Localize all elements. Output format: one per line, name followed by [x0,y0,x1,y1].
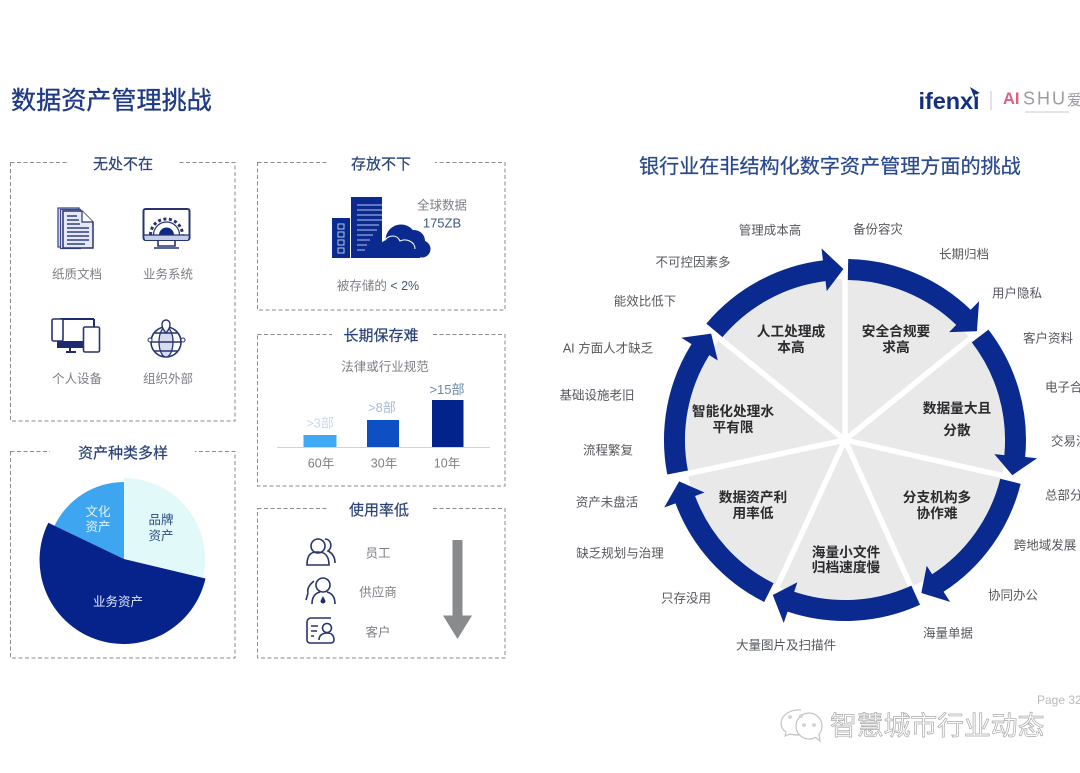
label: personal devices: 个人设备 [52,371,102,386]
pie chart: 资产 [148,529,174,543]
panel: 存放不下: 存放不下 [351,156,411,173]
sector: small file archiving: 归档速度慢 [812,559,881,575]
bar chart: >8部 [368,400,396,415]
logo: ifenxi and AISHU: ifenxi [918,88,980,114]
pie chart: 文化 [85,504,111,519]
panel: 长期保存难: 长期保存难 [343,328,419,344]
pie chart: 资产 [85,520,111,534]
icon: supplier [306,578,335,604]
sector: security compliance: 安全合规要 [862,324,930,339]
ring arrow: security [848,259,979,332]
outer labels: 客户资料 [1023,330,1073,346]
watermark icon: chat bubbles [781,710,822,741]
ring arrow: intelligence [640,331,739,475]
outer labels: 管理成本高 [739,222,801,238]
logo: ifenxi and AISHU: AI [1003,90,1020,108]
sector: manual cost: 人工处理成 [757,324,825,339]
outer labels: 大量图片及扫描件 [736,638,836,652]
outer labels: 用户隐私 [992,286,1042,300]
outer labels: 缺乏规划与治理 [576,546,664,560]
watermark text: 智慧城市行业动态 [830,711,1044,741]
icon: buildings and cloud [332,197,430,258]
stored share: 被存储的 < 2% [337,278,419,293]
icon: employee [307,539,335,565]
sector: limited intelligence: 智能化处理水 [692,404,774,419]
outer labels: 协同办公 [988,588,1038,602]
outer labels: 备份容灾 [853,222,903,236]
panel: 使用率低 [258,501,505,658]
page title: 数据资产管理挑战 [11,87,212,115]
panel: 无处不在: 无处不在 [93,156,153,173]
sector dividers [672,262,1018,602]
logo: ifenxi and AISHU [918,87,1080,114]
sector: large dispersed data: 分散 [943,422,971,438]
icon: customer [307,618,334,643]
panel: 无处不在 [10,155,235,421]
pie chart: 业务资产 [93,594,143,609]
pie chart: 品牌 [148,512,174,527]
outer labels: 不可控因素多 [655,256,731,270]
ring arrow: labour cost [706,222,846,370]
outer labels: 基础设施老旧 [559,388,635,402]
bar chart: 10年 [434,456,460,470]
ring arrow: branches [920,467,1021,611]
panel: 存放不下 [258,155,505,310]
label: customer: 客户 [365,624,391,640]
outer labels: 长期归档 [939,248,989,262]
outer labels: 只存没用 [661,590,711,606]
sector: manual cost: 本高 [777,339,805,355]
icon: personal devices [52,319,100,352]
sector: low utilisation: 数据资产利 [719,490,787,505]
outer labels: AI 方面人才缺乏 [563,340,654,356]
right heading: 银行业在非结构化数字资产管理方面的挑战 [639,155,1021,178]
ring arrow: small files [770,539,920,661]
icon: globe with pin [148,320,185,357]
label: outside organisation: 组织外部 [143,371,193,386]
ring arrow: volume [931,329,1070,477]
global data label: 全球数据 [417,198,467,212]
outer labels [559,222,1080,652]
outer labels: 海量单据 [923,626,973,640]
ring arrow: utilisation [646,480,796,602]
outer labels: 跨地域发展 [1014,538,1076,552]
outer labels: 流程繁复 [583,442,633,458]
sector: large dispersed data: 数据量大且 [923,401,991,416]
gray disc [684,279,1006,601]
sector: low utilisation: 用率低 [732,505,774,521]
label: business system: 业务系统 [143,266,193,282]
bar chart: 30年 [371,456,397,470]
label: supplier: 供应商 [359,584,397,600]
panel: 资产种类多样 [10,444,235,658]
label: paper documents: 纸质文档 [52,266,102,282]
icon: paper documents [58,208,93,248]
bar chart: >15部 [429,382,465,397]
circular diagram [640,222,1070,661]
sector: branch collaboration: 分支机构多 [903,490,971,505]
panel: 长期保存难 [258,327,505,486]
panel: 使用率低: 使用率低 [349,502,409,519]
bar chart: >3部 [306,416,334,430]
sector: security compliance: 求高 [882,339,910,355]
sector: small file archiving: 海量小文件 [812,545,880,560]
sector: branch collaboration: 协作难 [916,505,958,521]
panel: 资产种类多样: 资产种类多样 [78,445,168,462]
pie chart [40,478,205,644]
bar chart [277,382,490,470]
logo: ifenxi and AISHU: SHU [1023,88,1065,108]
icon: business system monitor [144,209,190,248]
global data value: 175ZB [423,216,461,230]
arrow: declining usage [443,540,472,639]
outer labels: 能效比低下 [614,294,676,308]
outer labels: 资产未盘活 [576,494,638,510]
sector: limited intelligence: 平有限 [712,420,754,435]
bar chart: 60年 [308,456,334,470]
chart subtitle: 法律或行业规范 [341,359,429,374]
label: employee: 员工 [365,546,391,560]
